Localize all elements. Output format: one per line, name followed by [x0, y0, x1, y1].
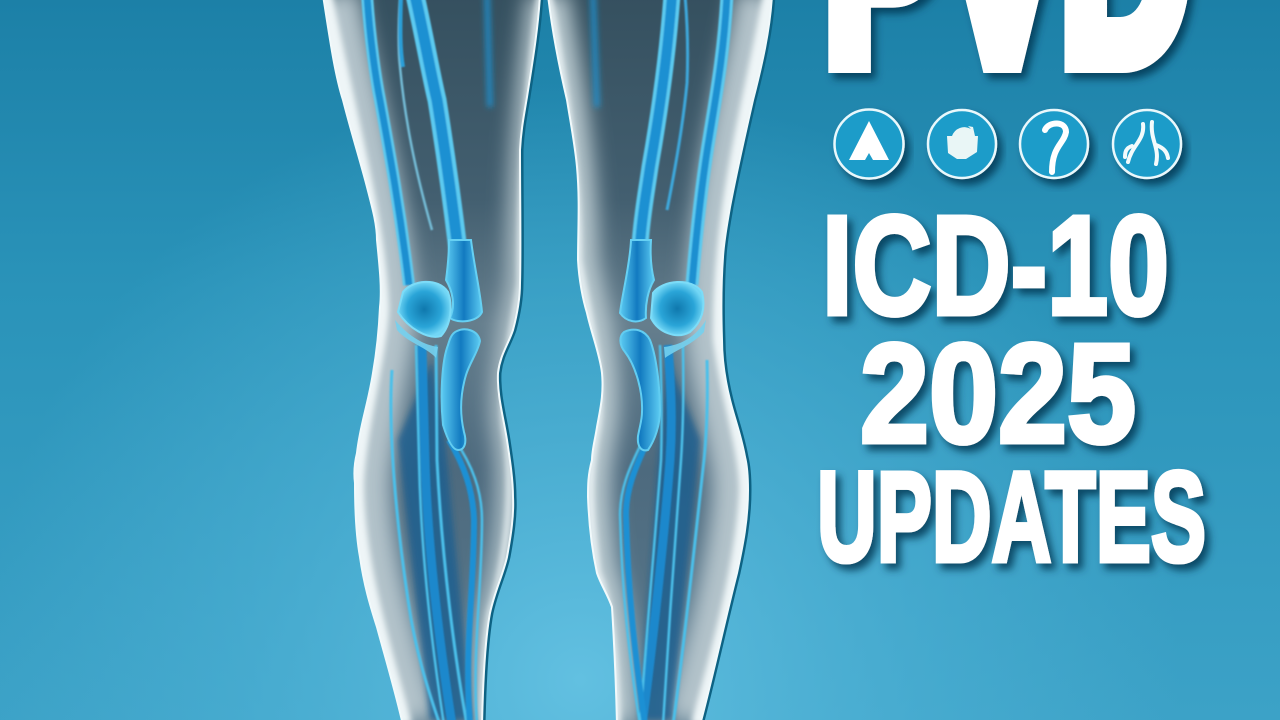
tibia: [620, 330, 660, 450]
vessels and bones: [367, 0, 490, 720]
dark core between shafts: [398, 360, 472, 720]
soft rim light: [700, 0, 772, 720]
soft rim light: [323, 0, 403, 720]
kneecap: [398, 282, 451, 337]
dark core between shafts: [640, 360, 700, 720]
icon: artery triangle: [834, 110, 904, 178]
illustration: translucent legs: [323, 0, 774, 720]
femur end: [620, 240, 654, 321]
femur end: [446, 240, 482, 321]
vessels and bones: [593, 0, 727, 720]
icon: question-shaped vessel: [1020, 110, 1088, 178]
kneecap: [651, 282, 704, 335]
icon: organ: [928, 110, 996, 178]
right leg: [548, 0, 774, 720]
title: 2025: 2025: [860, 314, 1136, 472]
icon: branching vessels: [1113, 110, 1181, 178]
title: ICD-10: ICD-10: [822, 186, 1169, 344]
tibia: [442, 329, 480, 450]
left leg: [323, 0, 542, 720]
icon row: [834, 110, 1181, 178]
